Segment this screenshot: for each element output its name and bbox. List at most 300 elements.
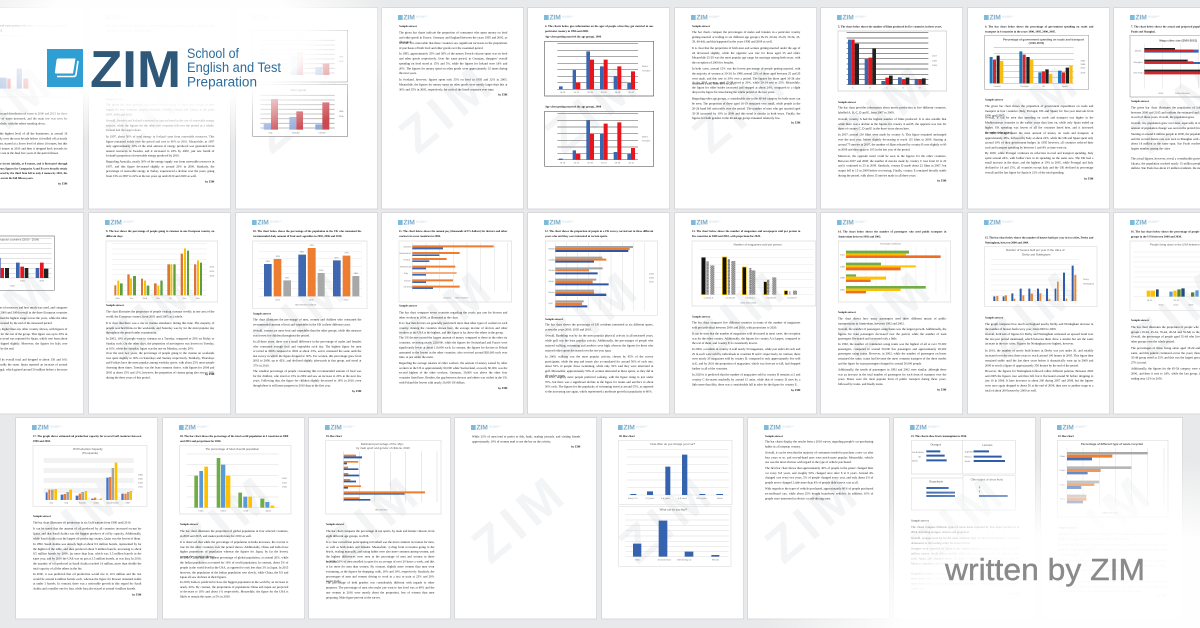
horizontal bar chart: different types of waste recycled: Glass <box>1059 456 1065 458</box>
horizontal bar chart: public transport: 1992 <box>840 288 845 291</box>
logo <box>764 425 794 431</box>
grouped bar chart: cinema visits by day: Fri <box>169 297 172 299</box>
panel: page 6, bottom row: The bar charts display the results from a 2018 survey regarding people's car-purchasing habits in a European country. <box>765 440 873 448</box>
panel: page 9, middle row: Sample answer <box>1131 318 1149 321</box>
horizontal bar chart: sports survey: 2010 <box>649 280 654 283</box>
horizontal bar chart: different types of waste recycled: Tyres <box>1059 498 1065 501</box>
patterned bar chart: magazines: Country E <box>787 297 797 299</box>
panel: page 1, bottom row: In 2000, it was predicted that oil production would rise to 10.5 million and the rest would be around 4 million barrels each, whereas the figure for Kuwait remained stable at under 3 barrels. In contrast, there was a noticeable growth in this regard for Saudi Arabia and a smaller one for Iran, while Iraq also stayed at around 4 million barrels. <box>33 573 141 590</box>
panel: page 4, bottom row: While 32% of men tend to prefer to fish, bank, reading journals, and visiting friends approximately 10% of women tend to use the bar on the activity. <box>472 435 580 443</box>
logo: School of English and Test Preparation <box>123 220 135 223</box>
panel: page 7, middle row: by ZIM <box>937 388 946 391</box>
panel: page 6, middle row: 13. The chart below shows the number of magazines and newspapers sold per person in five countries in 2000 and 2010, with projections for 2020. <box>692 229 800 237</box>
grouped bar chart: 2004 <box>39 279 44 282</box>
brand logo: ZIM School of English and Test Preparation <box>47 41 281 99</box>
panel: page 8, bottom row: ZIM <box>1047 463 1164 574</box>
panel: page 6, top row: The bar charts compare the percentages of males and females in a particular country getting married according to six different age groups (16-19, 20-24, 25-29, 30-34, 35-39, 40-44), and this happened in the years 1996 and 2008 as well. <box>692 30 800 43</box>
panel: page 8, middle row: Overall, both sets of figures for Derby and Nottingham witnessed an upward trend over the ten-year period mentioned, which between them show a similar but not the same increase in the two cities. Figures for Nottingham rose highest, however. <box>985 332 1093 345</box>
horizontal bar chart: sports survey: 2000 <box>649 272 654 275</box>
panel: page 4, top row: In Scotland, however, figures spent only 35% on food in 1995 and 32% in 2005. Meanwhile, the figures for money spent on other goods were mostly larger than this at 30% and 35% in 2005, respectively, for each of the listed countries over time. <box>399 78 507 91</box>
logo: ZIM <box>989 218 1000 226</box>
panel: page 4, middle row: 11. The chart below shows the annual pay (thousands of US dollars) for doctors and other workers in seven countries in 2004. <box>399 229 507 237</box>
logo: ZIM <box>403 14 415 21</box>
bar charts: food and other goods: 1995 <box>338 56 343 58</box>
panel: page 5, middle row: In 2000, walking was the most popular activity, chosen by 65% of the survey participants, while the pop and tennis also accumulated for around 50% of each one, about 55% of people chose swimming, while only 35% said they were interested in golf. Meanwhile, approximately 50% of women interested in these sports, as they did in the earlier years. <box>545 354 654 377</box>
logo: ZIM <box>37 424 48 431</box>
panel: page 8, bottom row: by ZIM <box>1157 594 1166 597</box>
bar charts: food and other goods: 1995 <box>338 110 343 113</box>
panel: page 6, middle row: ZIM <box>681 257 798 368</box>
panel: page 9, top row <box>1114 8 1200 209</box>
panel: page 3, top row <box>236 8 377 209</box>
grouped bar chart: government spending: (1990-2005) <box>1028 41 1044 45</box>
brand logo: ZIM School of English and Test Preparation: School of <box>187 46 239 61</box>
logo: School of English and Test Preparation <box>270 220 281 223</box>
bar chart: 2008: Males <box>642 136 648 138</box>
panel: page 2, top row: ZIM <box>95 52 213 164</box>
bar chart: people living alone <box>1130 240 1200 310</box>
bar chart: how often do you change your car: 4-6 years <box>661 498 670 500</box>
panel: page 5, middle row: 12. The chart shows the proportion of people in a UK survey carried out in three different years who said they were interested in certain sports. <box>545 229 654 237</box>
panel: page 4, top row: Overall, it is noticeable that these countries saw significant increases in the proportions of purchases of both food and other goods over the examined period. <box>399 41 507 49</box>
logo <box>471 424 501 431</box>
grouped bar chart: 2008 <box>932 60 937 62</box>
bar chart: how often do you change your car: 8-10 years <box>696 498 707 500</box>
logo <box>32 424 62 431</box>
logo: School of English and Test Preparation <box>489 426 501 428</box>
panel: page 7, middle row: The chart shows how many passengers used three different means of public transportation in Amsterdam, between 1992 and 2002. <box>838 316 946 325</box>
panel: page 7, bottom row: Sample answer <box>911 520 929 523</box>
logo: School of English and Test Preparation <box>928 426 940 428</box>
panel: page 6, top row: Regarding other age groups, a considerable rise in the 40-44 category for both sexes can be seen. The proportion of those aged 16-19 remained very small, while people in the 20-24 band fell noticeably over the period. The number of men who got married aged 35-39 increased by 10% in 2008 and this trend is similar in both sexes. Finally, the figures for both genders in the 40-44 age group remained relatively low. <box>692 97 800 120</box>
horizontal bar chart: megacities <box>1130 35 1200 98</box>
grouped bar chart: government spending: 1995 <box>1080 63 1085 66</box>
logo <box>1130 14 1160 21</box>
bar chart: 2008: 30-34 <box>601 162 607 164</box>
small multiple bar charts: citrus fruits: Argentina <box>965 451 974 453</box>
panel: page 1, top row: by ZIM <box>58 182 67 185</box>
bar chart: 2008: 20-24 <box>574 162 580 164</box>
panel: page 8, bottom row <box>1041 418 1182 619</box>
panel: page 7, middle row <box>821 213 962 413</box>
bar charts: food and other goods: 2005 <box>338 60 343 63</box>
panel: page 8, top row: 6. The bar chart below shows the percentage of government spending on roads and transport in 4 countries in the years 1990, 1995, 2000, 2005. <box>985 25 1093 33</box>
bar chart: 1996 <box>544 41 654 96</box>
horizontal bar chart: megacities: Mega cities size (2000-2015) <box>1159 39 1197 42</box>
bar chart: how often do you change your car: Never <box>717 498 723 500</box>
panel: page 5, middle row: Overall, Rambling was by far the most popular physical activity in all measured years, while golf was the least popular activity. Additionally, the percentages of people who enjoyed walking, swimming and aerobics were high, whereas the figures for those who enjoyed other sports decreased over the ten-year span. <box>545 334 654 352</box>
panel: page 7, top row: Sample answer <box>838 101 856 104</box>
panel: page 8, bottom row: 22. Bar chart <box>1058 435 1073 438</box>
bar charts: food and other goods: Sweden <box>292 132 300 134</box>
panel: page 6, top row: In both cases, around 15% was the lowest percentage of people getting married, with the majority of women at 30-34. In 1996 around 22% of those aged between 25 and 29 were male, and this rose to 30% over a period. The figures for those aged 30-34 also witnessed a rise, from 18% to 22%. <box>692 67 800 85</box>
bar chart: people living alone: 2000 <box>1158 303 1163 306</box>
horizontal bar chart: public transport: 1998 <box>840 265 845 268</box>
logo: ZIM <box>769 424 780 431</box>
horizontal bar chart: megacities: Jakarta <box>1134 50 1142 52</box>
panel: page 8, middle row: Sample answer <box>985 316 1003 319</box>
panel: page 7, bottom row: Grapefruit exports showed the Netherlands leading the group, and the other figures were close, with Turkey and South Africa exporting similar amounts. The remaining citrus fruits came from Spain in the main, with about 1.7 million tonnes of them overall in that year. <box>911 572 1020 590</box>
panel: page 2, middle row: ZIM <box>95 257 213 368</box>
logo <box>398 14 428 21</box>
small multiple bar charts: citrus fruits: Other types of citrus fruits <box>971 478 1003 482</box>
panel: page 5, top row <box>528 8 670 209</box>
grouped bar chart: fruit and vegetables: 2010 <box>343 299 348 301</box>
patterned bar chart: magazines: Country C <box>745 297 755 299</box>
bar chart: what car do you buy: What car do you buy? <box>659 508 687 512</box>
panel: page 7, bottom row: Overall, oranges were by far the most common type of citrus fruit exported, and Spain dominated as the leading seller for several fruits. <box>911 537 1020 545</box>
panel: page 4, middle row: It is clear that doctors are generally paid much more than other types of workers in each country. Among the countries shown here, the average income of doctors and other workers in the USA is the highest, and this figure is far above the others in the group. <box>399 321 507 334</box>
panel: page 3, middle row: 10. The chart below shows the percentage of the population in the UK who consumed the recommended daily amount of fruit and vegetables in 2002, 2006 and 2010. <box>253 229 361 237</box>
panel: page 8, bottom row: It seems that the amount of all types of waste that was recycled saw an increase, with glass and paper the highest of all. The figure for tyres was low but rose over the period of examination. <box>1058 543 1166 556</box>
panel: page 6, top row: Sample answer <box>692 25 710 28</box>
grouped bar chart: government spending: Ireland <box>993 85 1000 88</box>
panel: page 7, top row: Overall, country A had the highest number of films produced. It is also notable that while there was a decline in the figures for country A and B, the opposite was true for those of country C, D and E in the three years shown here. <box>838 117 946 130</box>
grouped bar chart: oil production capacity: 2010 <box>138 486 143 489</box>
horizontal bar chart: public transport <box>838 240 951 302</box>
horizontal bar chart: public transport: 1995 <box>840 277 845 279</box>
panel: page 7, top row: 5. The chart below shows the number of films produced by five countries in three years. <box>838 25 942 28</box>
panel: page 2, bottom row <box>163 418 304 619</box>
logo: ZIM <box>476 424 488 431</box>
grouped bar chart: fruit and vegetables: Men Women Children <box>295 303 316 306</box>
panel: page 5, middle row: The bar chart shows the percentage of UK residents interested in six different sports, across the years 2000, 2005 and 2010. <box>545 323 654 331</box>
panel: page 5, top row: ZIM <box>535 52 652 164</box>
small multiple bar charts: citrus fruits <box>894 418 1036 619</box>
grouped bar chart: cinema visits by day: 2003 <box>209 266 214 268</box>
panel: page 7, middle row: Sample answer <box>838 310 856 313</box>
panel: page 7, top row: ZIM <box>827 52 945 164</box>
panel: page 6, middle row: In 2000, a resident in country A sold nearly 50 magazines, while just under 40 each and 25 in each were sold by individuals in countries B and C respectively. In contrast, these were nearly 20 magazines sold by country D, compared to only approximately five sold in E, and by 2010 the proportion of magazines, which was forecast to fall, had dropped further in all of the countries. <box>692 347 800 370</box>
panel: page 3, bottom row: The percentage of both genders was considerably different with regards to other purposes. The percentage of men who make just went to fast food was at 40% and the one women in 2016 were mostly about the proportion, less of women than men preparing. Male figure percent in the survey. <box>326 581 434 599</box>
logo: School of English and Test Preparation <box>1148 15 1160 18</box>
grouped bar chart: world population share: The percentage of total of world population <box>205 448 259 451</box>
logo <box>910 425 940 431</box>
logo <box>984 218 1014 226</box>
panel: page 7, top row: Moreover, the opposite trend could be seen in the figures for the other countries. Between 2007 and 2008, the number of movies made by country C rose from 10 to 20 and it continued to 25 in 2009. Similarly, country D made about 22 films in 2007, but output fell to 15 in 2008 before recovering. Finally, country E remained broadly stable during the period, with about 15 movies made in all three years. <box>838 154 946 177</box>
horizontal bar chart: megacities: 2000 <box>1158 92 1163 95</box>
horizontal bar chart: annual pay: France <box>404 279 411 282</box>
logo: School of English and Test Preparation <box>562 15 574 18</box>
panel: page 3, bottom row: 19. Bar chart <box>326 435 341 438</box>
panel: page 4, middle row: Sample answer <box>399 304 417 307</box>
panel: page 3, middle row: Sample answer <box>253 312 271 315</box>
bar chart: how often do you change your car <box>602 418 743 619</box>
panel: page 1, bottom row <box>16 418 157 619</box>
horizontal bar chart: different types of waste recycled: 1999 2000 2005 <box>1102 512 1117 515</box>
panel: page 8, middle row: However, the figures for Nottingham followed rather different patterns. Between 2000 and 2005 the figures rose and then fell, but it fluctuated around 50 before dropping to just 10 in 2006. It later increases to about 200 during 2007 and 2008, but the figures were once again dropped to about 50 at the end of 2008, then rose to another surge to a total of about 200 houses by 2009 as well. <box>985 369 1093 392</box>
grouped bar chart: oil production capacity <box>32 445 148 506</box>
grouped bar chart: world population share: Japan <box>265 510 271 513</box>
panel: page 6, bottom row <box>748 418 889 619</box>
panel: page 8, bottom row: Between 2000 and 2004 the rates climbed again for most of the material, up to about 85% for paper, while the figures for glass and cans fell to lower rates, with tyres reaching almost 20%, a gradual rise at the end of this period of time. <box>1058 580 1166 593</box>
panel: page 2, top row: Regarding Australia, nearly 30% of the energy supply was from renewable resources in 1997, and this figure decreased slightly to around 20% in 2000. Similarly, the percentage of renewable energy in Turkey experienced a decline over the years, going from 33% in 1997 to 22% in the ten years up until 2010 and 2020 as well. <box>106 160 214 177</box>
horizontal bar chart: annual pay: Netherlands <box>400 266 412 268</box>
grouped bar chart: 2002 <box>20 279 25 282</box>
logo <box>252 14 282 21</box>
grouped bar chart: oil production capacity: 2005 <box>138 482 143 485</box>
grouped bar chart: government spending <box>984 35 1089 90</box>
panel: page 8, top row: By 2000, while Portugal continues its reduction in road and transport spending, Italy spent around 24%, with further rises in its spending on the same area. The UK had a small increase in the share, and the highest at 19% in 2005, while Portugal and Italy declined to 14 and 15%, all countries except Italy and the UK declined in percentage overall and the last figure for Spain is 21% of the total spending. <box>985 151 1093 174</box>
bar chart: how often do you change your car: 3-4 years <box>645 498 654 500</box>
panel: page 5, middle row: In 2010, slightly more people preferred walking, with the figure rising to just under 70%, but there was a significant decline in the figure for tennis and aerobics to about 50% each. The figures for the popularity of swimming stood at around 55%, as opposed to the increasing rate again, which represented a moderate growth in popularity to 60%. <box>545 375 654 393</box>
grouped bar chart: world population share: China <box>220 510 226 513</box>
horizontal bar chart: megacities: 2005 estimates <box>1175 92 1190 95</box>
grouped bar chart: cinema visits by day: Sat <box>183 297 186 299</box>
bar chart: 2008: 40-44 <box>629 162 634 164</box>
panel: page 6, bottom row: The first bar chart shows that approximately 30% of people in the poster changed their car every 6-8 years, and roughly 50% changed once after 6 to 8 years. Around 4% changed cars every two years, 5% of people changed every year, and only about 2% of people never changed. Little more than 4% of people didn't move cars at all. <box>765 467 873 484</box>
small multiple bar charts: citrus fruits: South Africa <box>912 452 924 454</box>
horizontal bar chart: annual pay: Italy <box>404 272 408 274</box>
panel: page 2, bottom row: It is observed that while the percentage of population in India increases, the reverse is true for the other countries over the period shown. Additionally, China and India have higher proportions of population whereas the figures for Japan, by far the lowest, among the countries shown. <box>180 541 288 558</box>
brand logo: ZIM School of English and Test Preparation: Preparation <box>187 74 257 90</box>
panel: page 2, top row <box>89 8 230 209</box>
panel: page 4, top row: The given bar charts indicate the proportion of consumers who spent money on food and other goods in France, Germany and England between the years 1995 and 2005, as illustrated. <box>399 31 507 44</box>
logo: School of English and Test Preparation <box>1002 15 1013 18</box>
bar chart: houses built <box>984 246 1098 307</box>
brand logo: ZIM School of English and Test Preparation: English and Test <box>187 60 281 75</box>
panel: page 3, middle row: Overall, women ate more fruit and vegetables than the other groups, while this measure was lowest for children throughout the period. <box>253 328 361 337</box>
bar charts: food and other goods: Other goods <box>290 88 306 92</box>
logo <box>1130 218 1160 226</box>
grouped bar chart: cinema visits by day: 2005 <box>209 274 214 277</box>
grouped bar chart: fruit and vegetables: 30% <box>334 256 338 259</box>
bar charts: food and other goods: Food <box>295 34 302 37</box>
panel: page 7, middle row: Additionally, the trends of passengers in 1992 and 2002 were similar, although there was an increase in the total number of passengers for each form of transport over the years. Buses were the most popular form of public transport during these years, followed by trams, and finally trains. <box>838 367 946 385</box>
grouped bar chart: oil production capacity: Iraq <box>64 502 68 505</box>
bar charts: food and other goods: Ireland <box>318 132 325 134</box>
logo: School of English and Test Preparation <box>416 15 428 18</box>
grouped bar chart: government spending: 2005 <box>1080 72 1085 74</box>
panel: page 1, bottom row: It can be noted that the amount of oil produced by all countries increased except for Qatar, and that Saudi Arabia was the biggest producer of oil by capacity. Additionally, while Saudi Arabia was the largest oil-producing country, Qatar was the lowest of them. <box>33 527 141 540</box>
panel: page 2, middle row: Sample answer <box>106 303 124 306</box>
logo: ZIM <box>696 14 707 21</box>
logo: School of English and Test Preparation <box>416 220 428 223</box>
horizontal bar chart: megacities: Sao Paulo <box>1133 72 1143 74</box>
bar chart: 1996: Males <box>642 65 648 68</box>
bar charts: food and other goods <box>252 30 348 137</box>
panel: page 3, top row: ZIM <box>242 52 359 164</box>
panel: page 3, middle row: The chart illustrates the percentage of men, women and children who consumed the recommended amount of fruit and vegetables in the UK in three different years. <box>253 317 361 326</box>
panel: page 8, top row: Overall, it can be seen that spending on roads and transport was higher in the Mediterranean countries in the earlier years than later on, while only Spain ended up higher. UK spending was lowest of all the countries listed here, and it increased throughout the period. <box>985 116 1093 134</box>
panel: page 9, middle row <box>1114 213 1200 413</box>
panel: page 1, bottom row: The bar chart illustrates oil production in six Gulf nations from 1990 until 2010. <box>33 521 131 525</box>
horizontal bar chart: annual pay: Doctors <box>443 296 451 299</box>
logo: ZIM <box>1135 14 1147 21</box>
small multiple bar charts: citrus fruits: Grapefruits <box>929 480 943 483</box>
grouped bar chart: oil production capacity: UAE <box>125 502 130 505</box>
logo <box>1057 425 1087 431</box>
panel: page 6, bottom row: Overall, it can be seen that the majority of consumers tended to purchase a new car after four years or so, and second-hand ones were much more popular. Meanwhile, vehicle use was the most obvious with regard to the type of vehicle purchased. <box>765 451 873 464</box>
grouped bar chart: 2007 <box>932 55 937 57</box>
panel: page 6, top row: As for 2008, women aged 25-29 stood at 20%, while 30-34 rose to 23%. Meanwhile, the figure for older brides increased and stopped at about 24%, compared to a slight drop in the figure for men during the whole period of the two years. <box>692 81 800 94</box>
icon: book <box>47 49 83 87</box>
logo: School of English and Test Preparation <box>636 426 647 428</box>
panel: page 4, middle row: The US doctors earned the largest amount of money compared to those in the other six countries, receiving nearly 220,000, while the figures for Switzerland and France were significantly lower at about 110,000 each. In contrast, the figures for doctors in Poland amounted to the lowest in the other countries, who received around $20,000 each over time, at just under the norm. <box>399 336 507 358</box>
panel: page 7, top row: by ZIM <box>937 179 946 182</box>
panel: page 9, top row: Sample answer <box>1131 100 1149 103</box>
horizontal bar chart: megacities: Shanghai <box>1133 61 1142 64</box>
grouped bar chart: world population share <box>179 445 292 514</box>
horizontal bar chart: sports survey: 2005 <box>649 276 654 279</box>
panel: page 3, bottom row: In 2016, 50% of men enrolled in sport for an average of over 20 hours a week, and this is far more for men than women. By contrast, slightly more women than men went swimming, as the figures for shopping, walk, 16% and 10%, respectively. Similarly, the percentages of men and women driving to work in a taxi or train at 23% and 20% respectively. <box>326 560 434 583</box>
grouped bar chart: fruit and vegetables: 42% <box>309 244 314 246</box>
bar chart: 2008 <box>544 111 654 167</box>
patterned bar chart: magazines: Country A <box>703 297 713 299</box>
horizontal bar chart: sports survey: Swim <box>549 280 554 282</box>
panel: page 3, bottom row: Sample answer <box>326 523 344 526</box>
grouped bar chart: government spending: 2000 <box>1080 67 1085 69</box>
bar chart: houses built: Derby and Nottingham <box>1022 252 1050 256</box>
logo: School of English and Test Preparation <box>782 426 793 428</box>
bar chart: people living alone: 18-24 <box>1147 299 1152 301</box>
grouped bar chart: fruit and vegetables: 20% <box>319 269 323 271</box>
logo <box>544 14 574 21</box>
bar chart: 1996: 16-19 <box>560 91 566 94</box>
panel: page 8, top row: In 1990, Portugal spent the most amount of money on roads and transport, at approximately 26%, followed by Italy at about 22%, while the UK and Spain spent only around 10% of their government budget. In 1995 however, all countries reduced their road and transport spending by between 3 and 4% as time went on. <box>985 131 1093 149</box>
panel: page 3, bottom row: The bar chart compares the percentage of top sports, by male and female citizens, from eight different age groups, in 2016. <box>326 530 434 538</box>
logo: ZIM <box>842 218 854 226</box>
panel: page 3, middle row: In all three years, there was a small difference in the percentage of males and females who consumed enough fruit and vegetables each day. The highest figure for men occurred in 2006 compared to 2002 at about 33%, and it remained the same until the last survey in which the figure dropped to 30%. For women, this percentage grew from 2002 to 2006, up to 42%, and declined slightly afterwards in that group, and stood at 37% in 2010. <box>253 339 361 367</box>
panel: page 4, middle row: Regarding the average salaries of other workers, the amount of money earned by other workers in the US is approximately 60,000 while Switzerland, at nearly 60,000, was the second highest of the other workers; Germany, 30,000 was above the other four countries listed here. Besides, the gap between doctors and others was widest in the US, with Poland the lowest with nearly 20,000 US dollars. <box>399 361 507 384</box>
small multiple bar charts: citrus fruits: Lemons <box>983 444 993 447</box>
bar chart: 2008: 25-29 <box>588 162 593 164</box>
panel: page 5, middle row: Sample answer <box>545 317 563 320</box>
panel: page 7, middle row: Overall, the number of passengers using buses saw the largest growth. Additionally, the figures for train passengers decreased over the period, while the number of tram passengers fluctuated and increased only a little. <box>838 327 946 340</box>
panel: page 3, bottom row: ZIM <box>315 463 432 574</box>
panel: page 1, middle row <box>0 213 83 413</box>
logo <box>252 218 282 226</box>
logo: School of English and Test Preparation <box>709 15 720 18</box>
patterned bar chart: magazines: Number of magazines sold per person <box>733 243 781 246</box>
panel: page 3, middle row: ZIM <box>242 257 359 368</box>
grouped bar chart: world population share: USA <box>243 510 248 513</box>
panel: page 3, middle row: by ZIM <box>352 389 361 392</box>
panel: page 2, top row: In 1997, about 50% of total energy in Iceland came from renewable resources. This figure remained stable over the period and rose to 60% in 2010. Meanwhile, in 1997 only approximately 10% of the total amount of energy produced was generated from natural resources in Sweden, and it increased to 16% by 2000, just one fourth of Iceland's proportion of renewable energy produced by 2010. <box>106 135 214 157</box>
bar chart: 1996: 30-34 <box>601 91 607 94</box>
panel: page 1, bottom row: by ZIM <box>132 593 141 596</box>
bar chart: what car do you buy: Second-hand <box>657 559 670 561</box>
panel: page 8, bottom row: In 1999, paper was the most recycled material of all, with a rate of about 50%, while the rate for glass was 40%, cans 30% and tyres 10%. In 2000 the rates rose, glass to 60%, and paper to 70%, with cans at 20% and tyres being low. <box>1058 559 1166 572</box>
brand logo: ZIM School of English and Test Preparation: ZIM <box>90 41 181 99</box>
grouped bar chart: government spending: Spain <box>1062 85 1067 88</box>
patterned bar chart: magazines <box>692 240 816 306</box>
panel: page 4, middle row: by ZIM <box>498 386 507 389</box>
panel: page 2, middle row: It is clear that there was a rise in cinema attendance during this time. The majority of people watched films on the weekends, and Saturday was by far the most popular day throughout the period under examination. <box>106 321 214 334</box>
grouped bar chart: fruit and vegetables: 2002 <box>275 299 280 301</box>
panel: page 4, bottom row <box>455 418 596 619</box>
grouped bar chart: fruit and vegetables: 28% <box>265 260 270 262</box>
horizontal bar chart: sports survey: Dance <box>549 291 555 293</box>
horizontal bar chart: annual pay: Other workers <box>455 296 469 299</box>
grouped bar chart: 2009 <box>932 64 937 67</box>
panel: page 2, middle row: The chart illustrates the proportion of people visiting cinemas weekly in one area of the world, the European country, from 2003 until 2005 as a whole. <box>106 310 214 318</box>
horizontal bar chart: sports survey: Golf <box>549 302 553 304</box>
logo <box>691 218 720 226</box>
panel: page 8, middle row: In 2001, the number of newly built homes in Derby was just under 20, and steadily increased over the next three years to reach around 100 homes in 2005. This figure then remained stable until the last three years before it dramatically went up in 2008 and 2009 to reach a figure of approximately 350 houses by the end of the period. <box>985 349 1093 367</box>
grouped bar chart <box>0 236 55 291</box>
panel: page 2, middle row: In 2003, 10% of people went to cinemas on a Tuesday, compared to 20% on Friday or Sunday each. On the other days, the proportion of moviegoers was lowest on Tuesday, at 10%, while the Saturday figure was the one on Monday, at only 20%. <box>106 337 214 350</box>
panel: page 4, top row: In 1995, approximately 35% and 38% of the money French citizens spent was on food and other goods respectively. Over the same period, in Germany, shoppers' overall spending on food stood at 15% and 5%, while the figures for Ireland were 14% and 20%. The figures for money spent on other goods were approximately 32 times during the next years. <box>399 52 507 75</box>
grouped bar chart: fruit and vegetables <box>252 240 368 309</box>
patterned bar chart: magazines: Country B <box>725 297 735 299</box>
logo <box>398 218 428 226</box>
horizontal bar chart: free-time activities: Estimated percentage of the 16pc <box>361 443 403 446</box>
panel: page 3, bottom row <box>309 418 450 619</box>
panel: page 2, middle row: 9. The bar shows the percentage of people going to cinemas in one European country on different days. <box>106 229 214 237</box>
logo: School of English and Test Preparation <box>1148 220 1160 223</box>
horizontal bar chart: annual pay <box>398 240 512 302</box>
panel: page 8, middle row: 15. The bar chart below shows the number of houses built per year in two cities, Derby and Nottingham, between 2000 and 2009. <box>985 236 1093 244</box>
logo: School of English and Test Preparation <box>562 220 574 223</box>
panel: page 1, bottom row: 17. The graph shows estimated oil production capacity for several Gulf countries between 1990 and 2010. <box>33 435 141 443</box>
panel: page 2, middle row: Over the next two years, the percentage of people going to the cinema on weekends rose quite slightly to 30% on Saturdays and Sunday respectively. Similarly, Thursdays and Fridays have the most popular among weekday goers, with about 25% more people choosing these times. Tuesday was the least common choice, with figures for 2004 and 2005 at about 15% and 13%, however; the proportion of cinema going also rose to 30% during the three years of this period. <box>106 351 214 379</box>
panel: page 6, middle row: It can be seen that the number of magazines sold decreased in most cases, the exception was for the other country. Additionally, the figures for country A is largest, compared to the rest of them, and country E is consistently lowest. <box>692 331 800 344</box>
grouped bar chart: cinema visits by day: Sun <box>196 297 200 299</box>
grouped bar chart: government spending: Portugal <box>1020 85 1028 88</box>
grouped bar chart: D <box>903 87 904 89</box>
panel: page 6, middle row: by ZIM <box>791 388 800 391</box>
logo <box>544 218 574 226</box>
panel: page 7, top row: In 2007, around 130 films were made by country A. This figure remained unchanged over the next year, before slightly decreasing to reach 115 films in 2009. Starting at around 75 movies in 2007, the number of films released by country B rose slightly to 80 in 2008 and then again to 105 in the last year of the period. <box>838 133 946 151</box>
logo: ZIM <box>842 14 854 21</box>
logo: ZIM <box>550 218 561 226</box>
grouped bar chart: world population share: 2000 <box>282 478 287 480</box>
logo: School of English and Test Preparation <box>197 426 208 428</box>
panel: page 5, bottom row: ZIM <box>608 463 725 574</box>
logo: School of English and Test Preparation <box>123 15 135 18</box>
logo: ZIM <box>989 14 1000 21</box>
logo: School of English and Test Preparation <box>1075 426 1086 428</box>
logo <box>984 14 1014 21</box>
grouped bar chart: fruit and vegetables: 18% <box>353 272 358 274</box>
grouped bar chart: oil production capacity: Qatar <box>93 502 99 505</box>
panel: page 8, middle row: The graph compares how much an England nearby Derby and Nottingham increase in the number of houses built every year, from 2000 to 2009. <box>985 322 1093 330</box>
grouped bar chart: fruit and vegetables: 2006 <box>308 299 313 301</box>
horizontal bar chart: annual pay: Poland <box>403 258 410 261</box>
small multiple bar charts: citrus fruits: UK <box>918 456 922 458</box>
sample answer heading: Sample answer <box>106 98 124 101</box>
panel: page 5, bottom row: 20. Bar chart <box>619 435 634 438</box>
bar chart: 1996: 25-29 <box>588 91 593 94</box>
bar chart: what car do you buy: New <box>635 559 639 561</box>
grouped bar chart: oil production capacity: Oil Production Capacity <box>73 448 103 451</box>
horizontal bar chart: annual pay: Switzerland <box>399 252 411 254</box>
grouped bar chart: cinema visits by day <box>106 240 218 302</box>
panel: page 3, middle row <box>236 213 377 413</box>
bar chart: 1996: Females <box>642 70 651 72</box>
bar chart: people living alone: 2010 <box>1173 303 1178 306</box>
bar chart: houses built: Number of houses built per year in the cities of <box>1006 248 1064 251</box>
bar chart: what car do you buy: Self-driving car <box>677 559 691 561</box>
logo <box>691 14 720 21</box>
horizontal bar chart: different types of waste recycled: Paper <box>1059 470 1065 472</box>
panel: page 8, top row: by ZIM <box>1084 177 1093 180</box>
panel: page 2, bottom row: In 2030, India is predicted to have the biggest population in the world by an increase to nearly 20%. By contrast, the proportions of populations China and Japan are projected to decrease to 16% and about 1% respectively. Meanwhile, the figure for the USA is likely to remain the same, at 5% in 2030. <box>180 581 288 598</box>
panel: page 6, middle row: Sample answer <box>692 315 710 318</box>
panel: page 5, top row: Age when getting married (by age group), 2008 <box>545 105 601 108</box>
grouped bar chart: fruit and vegetables: 37% <box>344 252 348 254</box>
grouped bar chart: oil production capacity: Iran <box>49 502 53 505</box>
panel: page 7, middle row: ZIM <box>827 257 945 368</box>
panel: page 4, bottom row: ZIM <box>461 463 579 574</box>
panel: page 5, top row: Age when getting married (by age group), 1996 <box>545 35 601 38</box>
bar chart: how often do you change your car: Every 2-3 <box>628 498 637 500</box>
grouped bar chart: world population share: 2015 <box>282 482 287 484</box>
panel: page 3, bottom row: It is clear overall that participating in football was the most common recreation for men, as well as both males and females. Meanwhile, cycling from recreation going to the beach, reading manually, and eating habits were also more common among women, and the highest differences were seen in the percentage of men and women in these activities. <box>326 541 434 563</box>
panel: page 4, bottom row: by ZIM <box>571 446 580 449</box>
bar chart <box>0 68 28 98</box>
